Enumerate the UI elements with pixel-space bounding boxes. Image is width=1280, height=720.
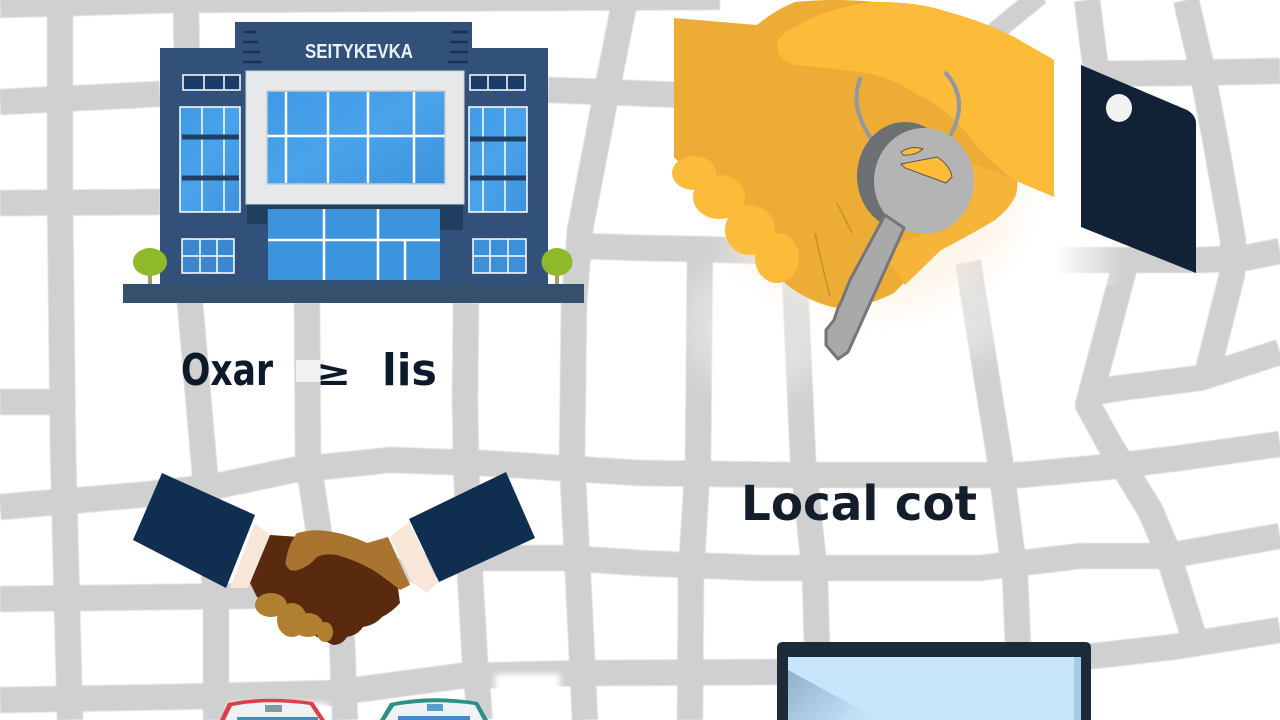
icon: red car: [220, 699, 325, 720]
palm creases: [815, 203, 852, 297]
light hand: [286, 530, 410, 590]
right upper windows: [469, 75, 527, 212]
right sleeve: [409, 472, 535, 582]
thumb: [777, 2, 1054, 197]
icon: dark tag: [1081, 65, 1196, 273]
roof vents: [243, 32, 468, 62]
garbled caption left: ≥: [316, 353, 351, 394]
caption: Local cot: Local cot: [741, 476, 977, 532]
icon: green car: [380, 698, 488, 720]
key ring: [856, 72, 959, 150]
icon: laptop screen: [777, 642, 1091, 720]
trees: [133, 248, 572, 284]
central framed window: [246, 71, 464, 204]
lower palm highlight: [880, 160, 1016, 285]
icon: handshake: [133, 472, 535, 645]
base slab: [123, 284, 584, 303]
garbled caption left: [181, 345, 437, 396]
icon: office building: [123, 22, 584, 303]
building body: [160, 22, 548, 285]
left sleeve: [133, 473, 255, 588]
white haze over roads: [228, 235, 1124, 720]
light fingers: [255, 593, 333, 642]
garbled caption left: lis: [382, 345, 437, 396]
key: [826, 122, 974, 359]
left cuff: [230, 523, 270, 588]
entrance glass: [268, 209, 440, 280]
fingers: [672, 156, 799, 283]
dark hand: [250, 535, 400, 645]
hand: [674, 0, 1054, 307]
garbled caption left: Oxar: [181, 345, 273, 396]
left upper windows: [180, 75, 240, 212]
entrance shadow blocks: [247, 204, 463, 230]
icon: hand holding key: [672, 0, 1054, 359]
right cuff: [390, 522, 438, 593]
building sign: SEITYKEVKA: [305, 41, 413, 63]
lower windows: [182, 239, 526, 273]
